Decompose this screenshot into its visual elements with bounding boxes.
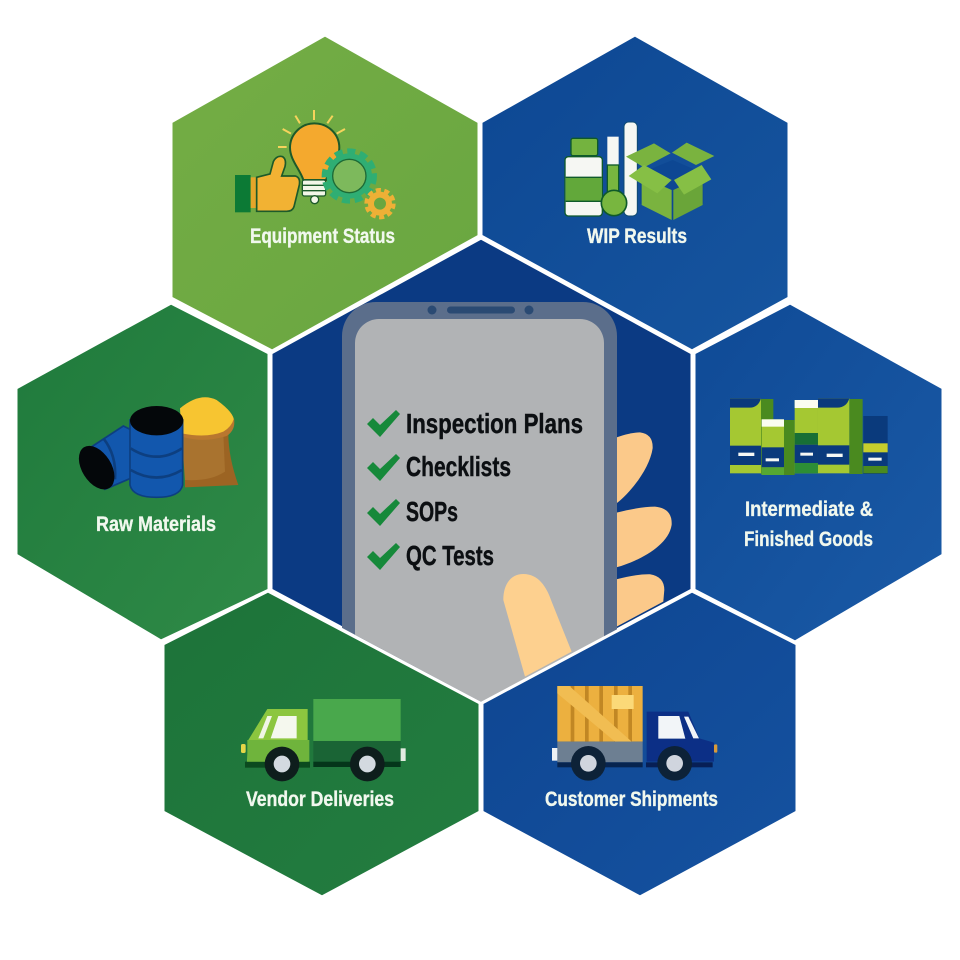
item: QC tests: QC Tests (406, 540, 494, 571)
panel: equipment status (171, 35, 479, 351)
icon: thumb, light bulb and gears (235, 110, 393, 217)
item: SOPs (367, 496, 458, 527)
panel: WIP results (481, 35, 789, 351)
panel: vendor deliveries (163, 591, 480, 897)
label: vendor deliveries: Vendor Deliveries (246, 788, 394, 811)
panel: intermediate and finished goods (694, 303, 943, 642)
label: raw materials: Raw Materials (96, 513, 216, 536)
label: WIP results: WIP Results (587, 225, 687, 248)
icon: blue truck with crate (552, 686, 717, 781)
icon: product boxes (730, 398, 888, 475)
panel: raw materials (16, 303, 269, 641)
label: equipment status: Equipment Status (250, 225, 395, 248)
label: intermediate and finished goods: Intermediate & (745, 498, 873, 521)
item: QC tests (367, 540, 494, 571)
panel: customer shipments (482, 591, 797, 897)
item: checklists: Checklists (406, 451, 511, 482)
item: checklists (367, 451, 511, 482)
icon: barrels and sack (72, 397, 238, 497)
label: intermediate and finished goods: Finished Goods (744, 528, 873, 551)
checklist (367, 408, 583, 571)
item: SOPs: SOPs (406, 496, 458, 527)
item: inspection plans (367, 408, 583, 439)
label: intermediate and finished goods (744, 498, 873, 551)
panel: center phone hexagon (271, 238, 692, 722)
icon: fingers behind phone (617, 432, 672, 627)
icon: bottle, flask, test tube and box (565, 122, 714, 220)
icon: green delivery truck (241, 699, 406, 781)
icon: pointing finger (503, 574, 572, 677)
label: customer shipments: Customer Shipments (545, 788, 718, 811)
icon: smartphone (342, 302, 617, 722)
item: inspection plans: Inspection Plans (406, 408, 583, 439)
